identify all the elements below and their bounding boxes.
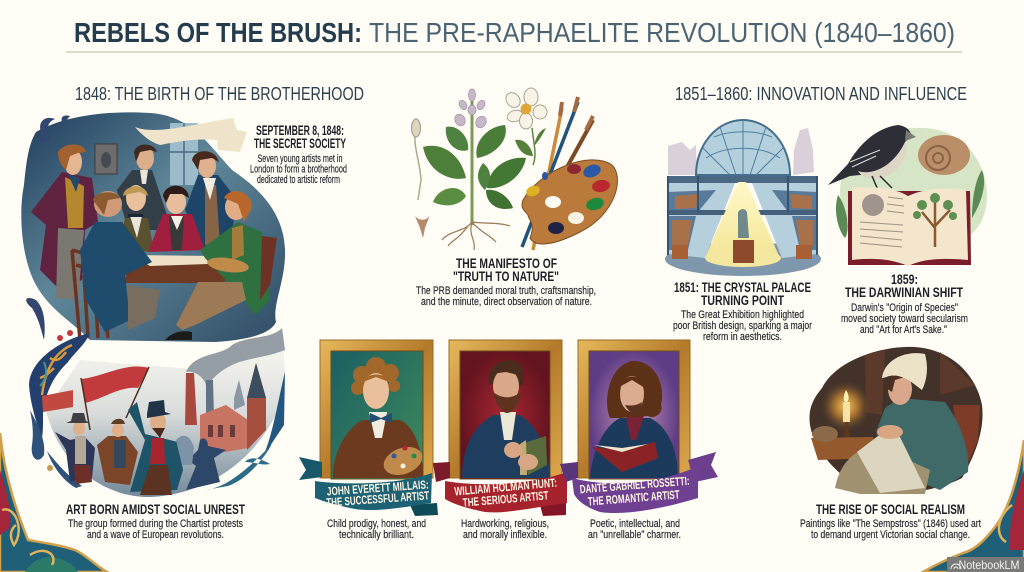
chair [953,405,980,470]
illustration: the seven brothers around a table [21,112,285,342]
text: art born amidst social unrest: and a wave of European revolutions. [87,529,224,541]
leaves [423,146,466,179]
text: Hunt description: and morally inflexible. [463,529,547,541]
candle [840,390,853,443]
text: the secret society: London to form a brotherhood [250,164,347,176]
open book [848,187,971,266]
right wedge [262,372,285,458]
text: manifesto of truth to nature [416,256,596,308]
text: crystal palace turning point: 1851: THE CRYSTAL PALACE [674,280,811,295]
table [125,258,238,283]
text: crystal palace turning point: reform in aesthetics. [703,331,782,343]
smoke [186,328,285,386]
ribbon: Rossetti [560,452,718,513]
back-view seated figure: blue coat [72,191,160,340]
text: art born amidst social unrest: The group formed during the Chartist protests [68,518,243,530]
text: the darwinian shift: 1859: [891,272,918,287]
title [66,17,962,52]
text: the secret society: SEPTEMBER 8, 1848: [256,123,344,138]
ornament: bottom-left corner [0,433,107,572]
title: REBELS OF THE BRUSH: [74,17,362,48]
lower swirls [205,444,272,490]
text: crystal palace turning point [673,280,812,343]
text: manifesto of truth to nature: and the minute, direct observation of nature. [421,296,592,308]
illustration: palette and brushes [522,97,617,250]
factory chimneys [185,373,197,425]
text: crystal palace turning point: TURNING POINT [701,293,785,308]
silhouettes [186,438,226,490]
text: manifesto of truth to nature: The PRB demanded moral truth, craftsmanship, [416,285,596,297]
heading: 1848 section: 1848: THE BIRTH OF THE BROTHERHOOD [75,84,364,104]
ribbon label: DANTE GABRIEL ROSSETTI: [579,474,690,496]
distant city [668,128,814,175]
text: the darwinian shift: THE DARWINIAN SHIFT [845,285,964,300]
ornament: bottom-right corner [923,440,1024,572]
illustration: the sempstress by candlelight [810,347,983,494]
ribbon label [454,476,558,510]
ornament swirls [26,116,70,340]
ribbon label: WILLIAM HOLMAN HUNT: [454,476,558,498]
text: the secret society: dedicated to artistic reform [257,174,340,186]
protester: middle [97,419,138,485]
bowl [812,426,838,442]
ribbon label: JOHN EVERETT MILLAIS: [326,477,429,499]
left and right halls [668,183,735,258]
ammonite fossil [918,135,970,175]
text: Millais description [327,518,426,541]
text: Hunt description [461,518,549,541]
illustration: crystal palace [665,120,821,276]
heading: 1851-1860 section: 1851–1860: INNOVATION AND INFLUENCE [675,84,967,104]
ribbon label [579,474,690,509]
text: the secret society: Seven young artists met in [258,153,342,165]
ribbon: Hunt [433,462,567,516]
illustration: botanical plant [412,89,526,250]
woman in green dress [835,353,968,494]
protester: leader in top hat [128,400,183,495]
portrait: William Holman Hunt [449,340,562,479]
table [811,437,880,460]
text: manifesto of truth to nature: "TRUTH TO NATURE" [453,269,559,284]
text: rise of social realism: THE RISE OF SOCIAL REALISM [816,502,965,517]
portrait: Dante Gabriel Rossetti [578,340,690,479]
ironwork gallery [667,176,818,183]
distant spire [234,380,245,410]
buds [453,89,488,130]
seated figure: olive coat [118,185,154,252]
protester: left [55,413,95,484]
illustration: darwin finch, fossil and book [828,125,987,266]
illustration: white flower [503,88,547,165]
text: crystal palace turning point: poor British design, sparking a major [673,320,812,332]
decorative droplets [30,410,82,488]
seated figure: crimson coat [148,186,205,252]
finch [828,125,916,190]
red brick buildings [200,405,248,452]
ribbon label: THE SUCCESSFUL ARTIST [326,488,430,510]
candle glow [820,380,872,432]
text: manifesto of truth to nature: THE MANIFESTO OF [456,256,557,271]
ribbon label [326,477,430,510]
portrait: John Everett Millais [320,340,433,480]
portrait on wall [95,144,117,174]
roots [442,222,510,250]
standing figure: dark coat [117,144,167,230]
side specimens [415,128,421,200]
floor [665,242,821,276]
text: rise of social realism [800,502,981,541]
text: art born amidst social unrest [66,502,246,541]
wall panels [865,350,975,415]
text: Hunt description: Hardworking, religious, [461,518,549,530]
text: crystal palace turning point: The Great Exhibition highlighted [681,309,804,321]
display plinths [672,245,688,259]
text: the darwinian shift: Darwin's "Origin of Species" [851,302,958,314]
ribbon label: THE SERIOUS ARTIST [462,488,550,510]
ribbon: Millais [299,457,438,516]
illustration: social unrest scene [29,328,285,497]
flags [82,367,149,403]
text: the secret society: THE SECRET SOCIETY [254,136,346,151]
text: art born amidst social unrest: ART BORN AMIDST SOCIAL UNREST [66,502,246,517]
glass dome [696,120,790,175]
spotlight cone [705,182,780,258]
seated figure: green coat [165,191,277,340]
statue on pedestal [738,209,749,238]
ribbon label: THE ROMANTIC ARTIST [587,487,681,509]
tree of life [922,200,950,247]
ornamental floral band [29,330,90,438]
text: rise of social realism: to demand urgent Victorian social change. [811,529,970,541]
text: the darwinian shift: moved society toward secularism [841,313,968,325]
text: Rossetti description: Poetic, intellectual, and [590,518,680,530]
title: THE PRE-RAPHAELITE REVOLUTION (1840–1860) [369,17,955,48]
text: the darwinian shift [841,272,968,336]
standing figure: maroon coat [31,144,98,300]
window [170,123,198,185]
standing figure: navy coat [185,151,237,250]
text: Rossetti description [588,518,681,541]
text: Rossetti description: an "unrellable" charmer. [588,529,681,541]
text: Millais description: Child prodigy, honest, and [327,518,426,530]
text: the secret society [250,123,347,186]
text: Millais description: technically brilliant. [339,529,414,541]
laurel sprigs [836,170,984,238]
scroll banner [135,118,247,152]
text: the darwinian shift: and "Art for Art's Sake." [860,324,947,336]
